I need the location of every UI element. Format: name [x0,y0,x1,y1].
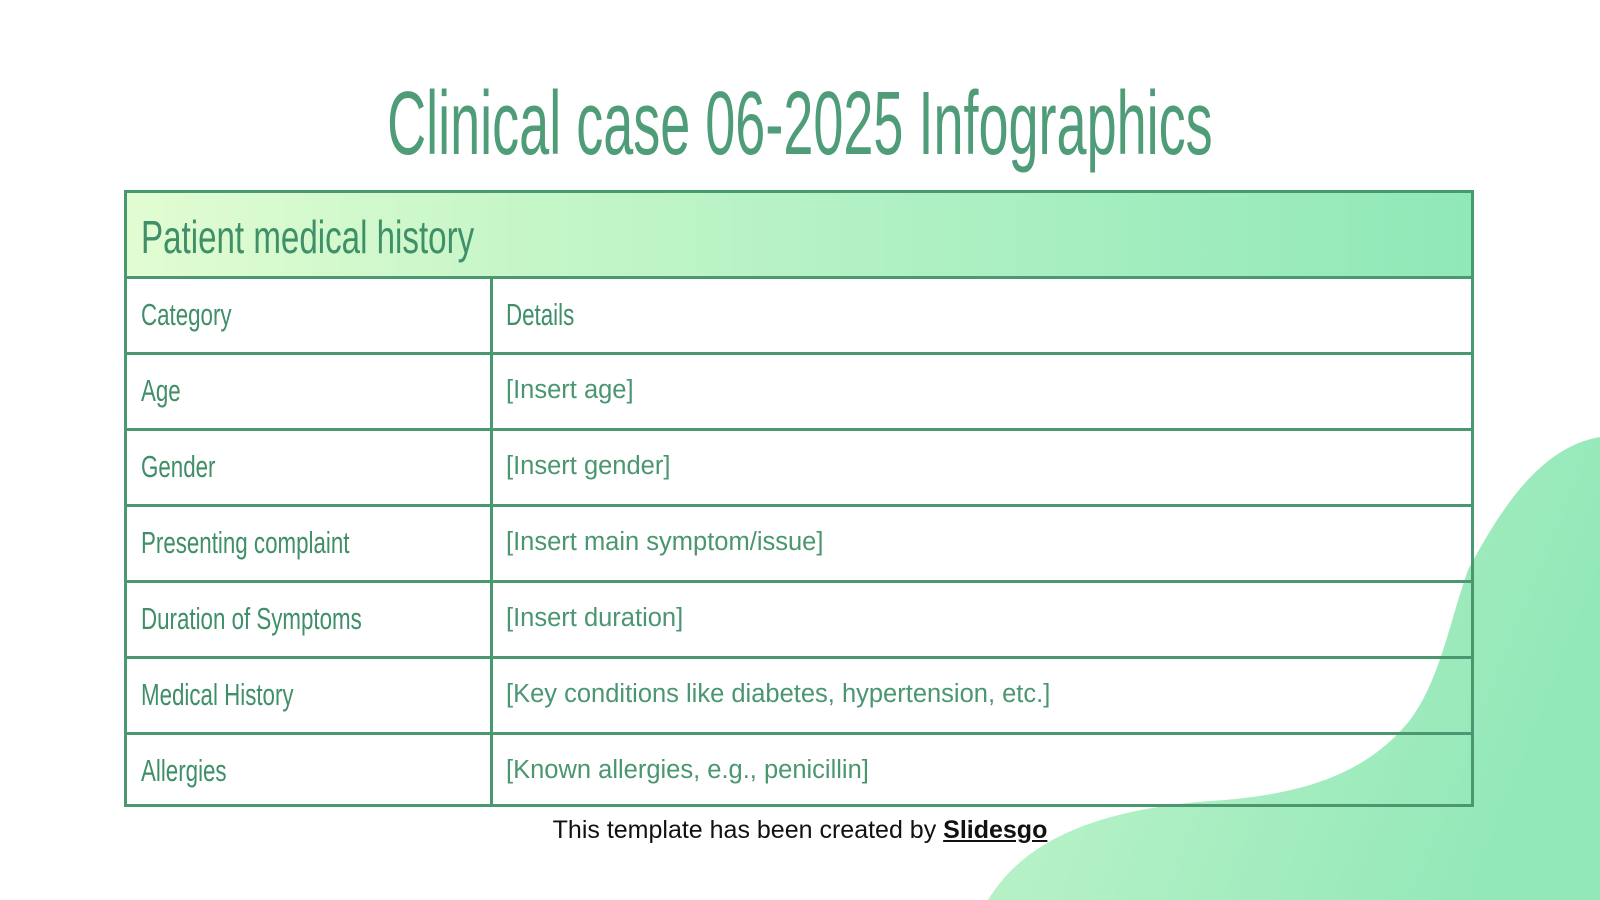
row: age [127,352,1471,428]
row: medical history: [Key conditions like diabetes, hypertension, etc.] [506,680,1050,708]
table header: Patient medical history [141,211,474,263]
table: patient medical history [124,190,1474,807]
row: allergies: Allergies [141,753,227,788]
row: header labels: Details [506,297,574,332]
row: duration: Duration of Symptoms [141,601,362,636]
row: medical history: Medical History [141,677,294,712]
row: age: [Insert age] [506,376,634,404]
row: gender: [Insert gender] [506,452,670,480]
row: presenting complaint [127,504,1471,580]
row: gender [127,428,1471,504]
table header [127,193,1471,276]
row: medical history [127,656,1471,732]
row: duration [127,580,1471,656]
title: Clinical case 06-2025 Infographics [387,74,1213,174]
row: age: Age [141,373,181,408]
row: header labels: Category [141,297,232,332]
column divider [490,276,493,807]
row: presenting complaint: [Insert main symptom/issue] [506,528,823,556]
row: gender: Gender [141,449,215,484]
row: duration: [Insert duration] [506,604,683,632]
footer credit: This template has been created by Slidesgo [553,816,1047,844]
row: allergies [127,732,1471,807]
row: allergies: [Known allergies, e.g., penicillin] [506,756,869,784]
row: presenting complaint: Presenting complaint [141,525,349,560]
row: header labels [127,276,1471,352]
